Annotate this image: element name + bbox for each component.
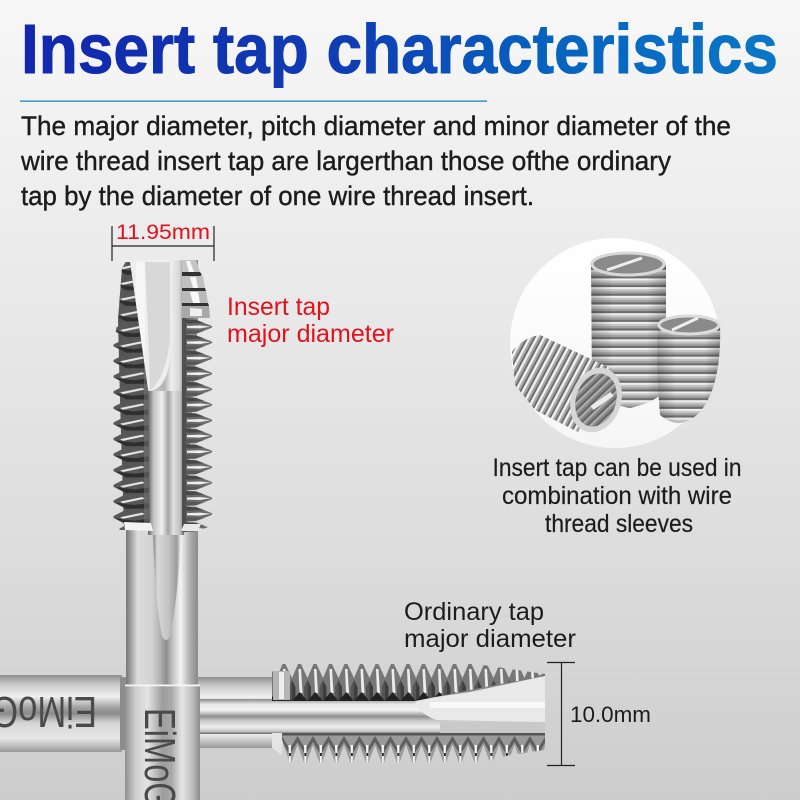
caption: wire thread sleeves: thread sleeves [545,510,693,538]
ordinary tap: horizontal threaded body [198,663,546,764]
label: insert tap major diameter [227,293,394,348]
caption: wire thread sleeves: Insert tap can be used in [492,454,742,482]
wire thread inserts photo [510,238,720,448]
standing coil [591,253,666,408]
description text: wire thread insert tap are largerthan those ofthe ordinary [20,146,671,176]
ordinary tap neck [198,677,274,748]
lying coil [512,335,630,439]
label: ordinary tap major diameter [404,598,576,653]
label: insert tap major diameter: Insert tap [227,293,330,321]
ordinary tap bottom thread [272,733,546,764]
description text: tap by the diameter of one wire thread insert. [21,181,534,211]
insert tap shank groove [153,530,181,640]
insert tap left thread [112,262,150,530]
label: ordinary tap major diameter: Ordinary tap [404,598,544,626]
ordinary tap flute [415,676,545,722]
white circle [510,238,720,448]
upper right taper bands [182,260,210,318]
insert tap thread shoulder [124,522,201,531]
dimension: 11.95mm [112,221,214,261]
insert tap upper shank [126,525,198,685]
caption: wire thread sleeves [492,454,742,538]
insert tap right thread [182,260,214,532]
insert tap collar line [125,684,200,686]
title underline [20,100,487,102]
dimension: 10.0mm: 10.0mm [570,702,651,727]
ordinary tap tip body [415,674,545,747]
caption: wire thread sleeves: combination with wire [502,482,732,510]
dimension: 10.0mm [547,662,651,766]
description text: The major diameter, pitch diameter and minor diameter of the [21,111,731,141]
insert tap lower shank [125,686,200,800]
bullet coil [657,316,720,423]
insert tap: vertical tool [112,260,214,800]
ordinary tap top thread [272,663,545,701]
horizontal tap: left shank stub with mirrored brand [0,675,126,752]
insert tap flute [126,260,172,391]
ordinary tap core [198,699,545,734]
label: insert tap major diameter: major diameter [227,320,394,348]
description text [20,111,731,211]
label: ordinary tap major diameter: major diameter [404,625,576,653]
dimension: 11.95mm: 11.95mm [116,221,210,244]
insert tap head core [124,260,198,535]
